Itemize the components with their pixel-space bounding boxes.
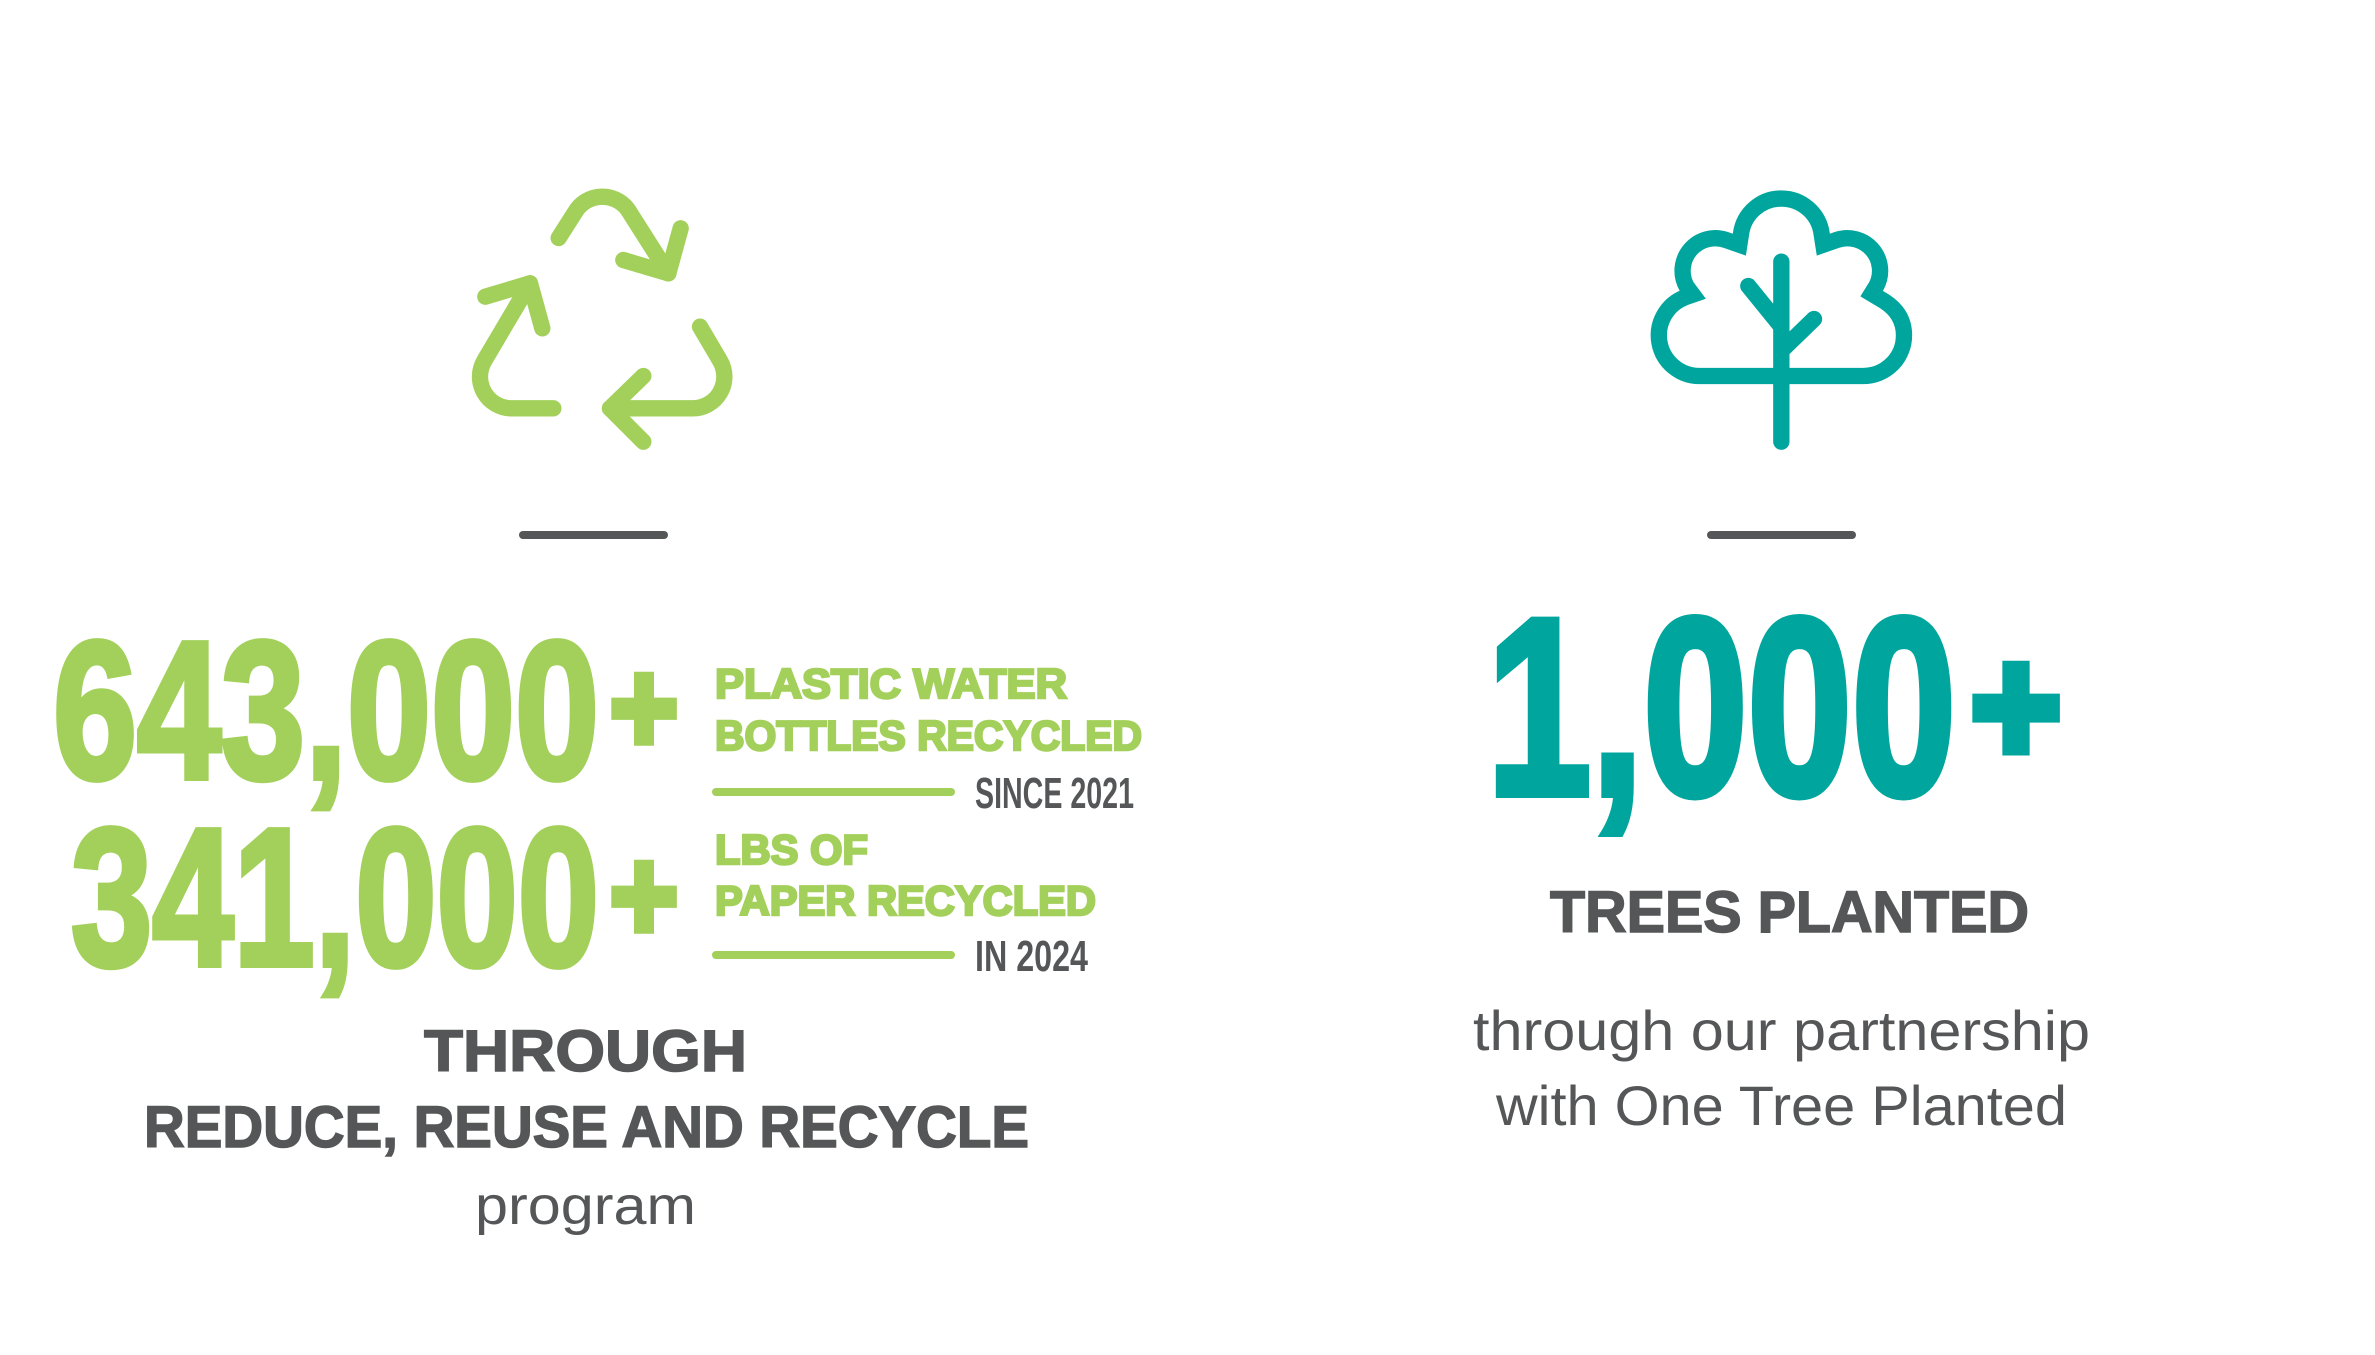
text: partnership: with One Tree Planted <box>1495 1074 2067 1137</box>
label: lbs of paper recycled <box>715 826 1096 924</box>
rule: since 2021 <box>712 788 955 796</box>
label: plastic water bottles recycled: BOTTLES RECYCLED <box>715 712 1142 759</box>
heading: through reduce reuse and recycle: REDUCE, REUSE AND RECYCLE <box>144 1095 1029 1160</box>
divider: trees <box>1707 531 1856 539</box>
text: program: program <box>475 1176 696 1236</box>
label: lbs of paper recycled: PAPER RECYCLED <box>715 877 1096 924</box>
stat: plastic bottles plus: + <box>610 634 678 780</box>
stat: paper plus: + <box>610 822 678 968</box>
label: plastic water bottles recycled <box>715 660 1142 759</box>
heading: through reduce reuse and recycle: THROUGH <box>424 1019 747 1084</box>
label: lbs of paper recycled: LBS OF <box>715 826 868 873</box>
stat: plastic bottles number: 643,000 <box>53 601 599 820</box>
panel: trees <box>1473 199 2090 1137</box>
label: in 2024: IN 2024 <box>975 932 1088 981</box>
heading: through reduce reuse and recycle <box>144 1019 1029 1160</box>
label: plastic water bottles recycled: PLASTIC WATER <box>715 660 1067 707</box>
rule: in 2024 <box>712 951 955 959</box>
icon: tree <box>1659 199 1904 442</box>
icon: recycle arrows <box>480 197 724 442</box>
stat: trees number: 1,000 <box>1487 567 1956 848</box>
text: partnership <box>1473 999 2090 1137</box>
divider: recycling <box>519 531 668 539</box>
text: partnership: through our partnership <box>1473 999 2090 1062</box>
label: since 2021: SINCE 2021 <box>975 769 1134 818</box>
stat: trees plus: + <box>1971 614 2061 798</box>
heading: trees planted: TREES PLANTED <box>1550 880 2029 945</box>
panel: recycling <box>53 197 1142 1236</box>
stat: paper number: 341,000 <box>71 788 599 1007</box>
